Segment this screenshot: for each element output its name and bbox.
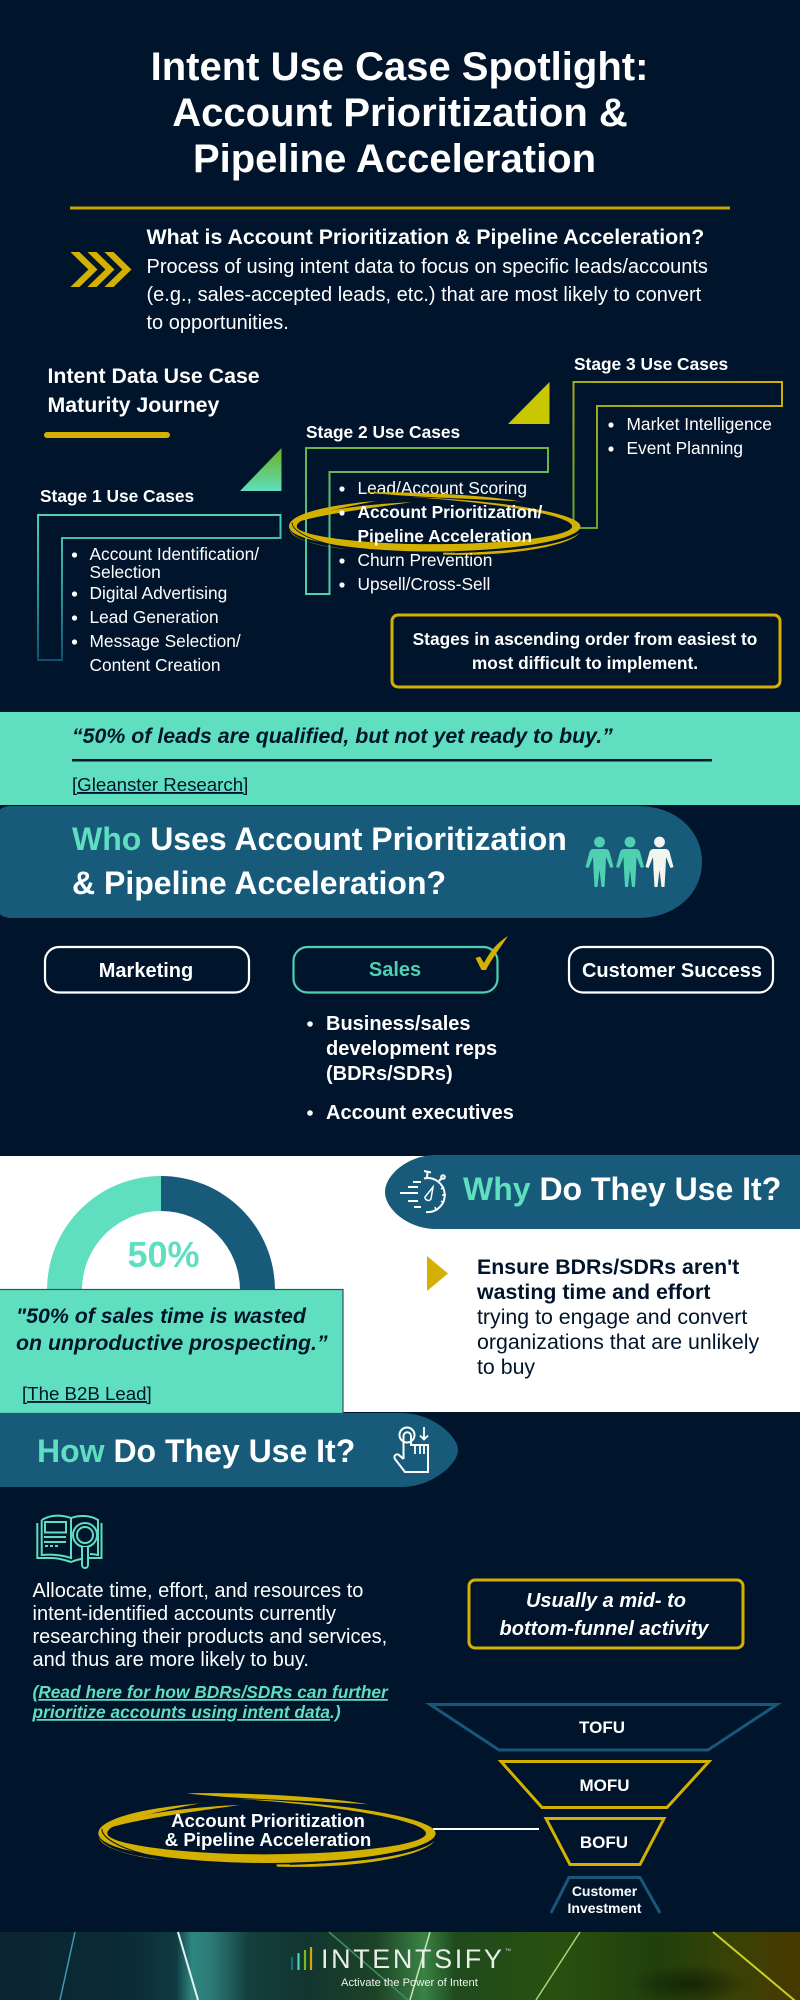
footer banner bbox=[0, 1932, 800, 2000]
list: sales roles bbox=[307, 1013, 514, 1124]
icon: book with magnifier bbox=[37, 1516, 101, 1568]
panel: stage 1 use cases: Selection bbox=[90, 562, 161, 582]
funnel bbox=[430, 1704, 777, 1916]
callout: stages order bbox=[392, 615, 780, 687]
panel: stage 2 use cases: Churn Prevention bbox=[358, 550, 492, 570]
panel: stage 1 use cases: Lead Generation bbox=[90, 607, 219, 627]
text block: why reason: trying to engage and convert bbox=[477, 1305, 747, 1329]
quote band: Gleanster: [Gleanster Research] bbox=[72, 774, 248, 795]
funnel stage: BOFU bbox=[546, 1818, 664, 1864]
icon: tap hand bbox=[394, 1427, 428, 1472]
definition text block: to opportunities. bbox=[146, 312, 289, 334]
funnel stage: customer investment: Customer bbox=[572, 1883, 638, 1899]
link text: read here bbox=[32, 1682, 389, 1722]
donut chart: 50 percent bbox=[47, 1176, 275, 1290]
quote panel: B2B Lead: on unproductive prospecting.” bbox=[16, 1331, 328, 1355]
funnel stage: MOFU bbox=[501, 1762, 709, 1808]
callout: funnel activity bbox=[469, 1580, 743, 1648]
logo: Intentsify: INTENTSIFY bbox=[321, 1944, 505, 1974]
heading pill: why: Why Do They Use It? bbox=[463, 1171, 781, 1207]
text block: why reason: wasting time and effort bbox=[476, 1280, 710, 1304]
list: sales roles: Business/sales bbox=[326, 1013, 471, 1035]
callout: stages order: Stages in ascending order from easiest to bbox=[413, 629, 757, 649]
button: customer success: Customer Success bbox=[582, 960, 762, 982]
button: sales bbox=[294, 947, 498, 992]
icon: three people bbox=[586, 837, 674, 887]
panel: stage 3 use cases: Stage 3 Use Cases bbox=[574, 354, 728, 374]
heading pill: who uses bbox=[0, 806, 702, 918]
panel: stage 2 use cases: Lead/Account Scoring bbox=[358, 478, 527, 498]
highlight oval: account prioritization bbox=[98, 1793, 436, 1867]
icon: gold arrow bbox=[427, 1256, 448, 1291]
definition text block: What is Account Prioritization & Pipeline Acceleration? bbox=[146, 225, 704, 249]
definition text block bbox=[146, 225, 708, 334]
panel: stage 1 use cases: Message Selection/ bbox=[90, 631, 241, 651]
quote band: Gleanster: “50% of leads are qualified, but not yet ready to buy.” bbox=[72, 724, 613, 748]
button: marketing bbox=[45, 947, 249, 992]
funnel stage: MOFU: MOFU bbox=[579, 1776, 630, 1795]
list: sales roles: development reps bbox=[326, 1038, 497, 1060]
text block: why reason: to buy bbox=[477, 1355, 535, 1379]
quote panel: B2B Lead: [The B2B Lead] bbox=[22, 1383, 152, 1404]
title bbox=[151, 45, 648, 181]
panel: stage 1 use cases: Content Creation bbox=[90, 655, 221, 675]
panel: stage 2 use cases: Account Prioritization/ bbox=[358, 502, 543, 522]
button: sales: Sales bbox=[369, 959, 421, 981]
logo: Intentsify: Activate the Power of Intent bbox=[341, 1977, 479, 1989]
button: customer success bbox=[569, 947, 773, 992]
callout: funnel activity: bottom-funnel activity bbox=[500, 1618, 709, 1640]
funnel stage: BOFU: BOFU bbox=[580, 1833, 628, 1852]
panel: stage 3 use cases: Event Planning bbox=[626, 438, 743, 458]
highlight oval: stage 2 bbox=[289, 492, 580, 555]
logo: Intentsify: TM bbox=[505, 1947, 511, 1952]
donut chart: 50 percent: 50% bbox=[127, 1234, 200, 1275]
white band bbox=[0, 1156, 800, 1412]
definition text block: Process of using intent data to focus on specific leads/accounts bbox=[146, 256, 708, 278]
callout: stages order: most difficult to implement. bbox=[472, 653, 698, 673]
icon: stopwatch bbox=[400, 1171, 446, 1212]
funnel stage: TOFU: TOFU bbox=[579, 1718, 625, 1737]
quote panel: B2B Lead: "50% of sales time is wasted bbox=[16, 1304, 307, 1328]
callout: funnel activity: Usually a mid- to bbox=[526, 1590, 686, 1612]
text block: allocate: intent-identified accounts currently bbox=[32, 1603, 336, 1625]
heading: maturity journey: Intent Data Use Case bbox=[48, 364, 260, 388]
heading: maturity journey bbox=[44, 364, 260, 438]
text block: allocate: and thus are more likely to buy. bbox=[32, 1649, 309, 1671]
panel: stage 2 use cases bbox=[240, 422, 580, 594]
icon: gold chevrons bbox=[70, 252, 132, 287]
heading pill: who uses: & Pipeline Acceleration? bbox=[72, 865, 446, 901]
heading pill: why bbox=[385, 1155, 800, 1229]
text block: allocate: researching their products and services, bbox=[32, 1626, 387, 1648]
panel: stage 2 use cases: Pipeline Acceleration bbox=[358, 526, 532, 546]
icon: gold check mark bbox=[476, 936, 508, 970]
panel: stage 1 use cases bbox=[38, 486, 280, 675]
panel: stage 3 use cases bbox=[508, 354, 782, 528]
title: Intent Use Case Spotlight: bbox=[151, 45, 648, 89]
connector line bbox=[433, 1828, 539, 1830]
highlight oval: account prioritization: & Pipeline Acceleration bbox=[165, 1829, 371, 1850]
heading pill: who uses: Who Uses Account Prioritization bbox=[72, 821, 567, 857]
highlight oval: account prioritization: Account Prioritization bbox=[171, 1810, 365, 1831]
button: marketing: Marketing bbox=[99, 960, 193, 982]
panel: stage 2 use cases: Upsell/Cross-Sell bbox=[358, 574, 490, 594]
text block: why reason: organizations that are unlikely bbox=[477, 1330, 760, 1354]
funnel stage: customer investment bbox=[551, 1878, 660, 1916]
definition text block: (e.g., sales-accepted leads, etc.) that are most likely to convert bbox=[146, 284, 702, 306]
panel: stage 1 use cases: Account Identification/ bbox=[90, 544, 259, 564]
list: sales roles: (BDRs/SDRs) bbox=[326, 1063, 453, 1085]
text block: allocate bbox=[32, 1580, 387, 1671]
text block: why reason: Ensure BDRs/SDRs aren't bbox=[477, 1255, 739, 1279]
title: Account Prioritization & bbox=[172, 91, 628, 135]
funnel stage: TOFU bbox=[430, 1704, 777, 1750]
heading pill: how: How Do They Use It? bbox=[37, 1433, 355, 1469]
quote panel: B2B Lead bbox=[0, 1290, 343, 1414]
panel: stage 1 use cases: Stage 1 Use Cases bbox=[40, 486, 194, 506]
logo: Intentsify bbox=[292, 1944, 511, 1989]
funnel stage: customer investment: Investment bbox=[568, 1900, 642, 1916]
quote band: Gleanster bbox=[0, 712, 800, 805]
heading: maturity journey: Maturity Journey bbox=[48, 393, 219, 417]
title: Pipeline Acceleration bbox=[193, 137, 596, 181]
link text: read here: prioritize accounts using intent data.) bbox=[32, 1702, 341, 1722]
heading pill: how bbox=[0, 1413, 458, 1487]
text block: why reason bbox=[476, 1255, 760, 1379]
panel: stage 3 use cases: Market Intelligence bbox=[626, 414, 772, 434]
link text: read here: (Read here for how BDRs/SDRs can further bbox=[32, 1682, 389, 1702]
list: sales roles: Account executives bbox=[326, 1102, 514, 1124]
panel: stage 1 use cases: Digital Advertising bbox=[90, 583, 227, 603]
panel: stage 2 use cases: Stage 2 Use Cases bbox=[306, 422, 460, 442]
text block: allocate: Allocate time, effort, and resources to bbox=[32, 1580, 363, 1602]
